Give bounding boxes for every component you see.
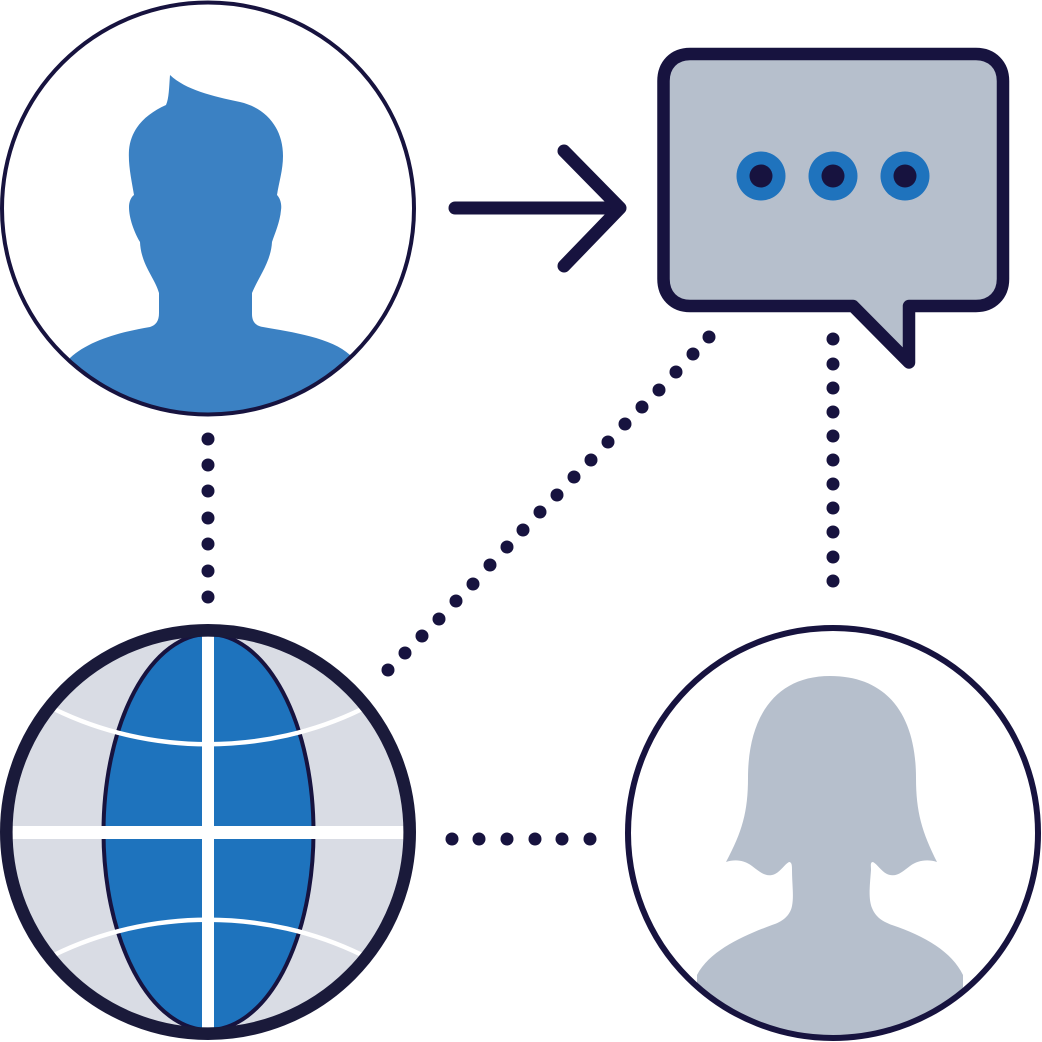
dotted connector: male user to globe	[202, 432, 214, 604]
icon: globe	[6, 630, 410, 1034]
dotted connector: speech bubble to female user	[826, 332, 840, 588]
icon: typing dot two	[808, 152, 858, 200]
icon: typing dot one	[736, 152, 786, 200]
dotted connector: globe to female user	[446, 832, 596, 846]
icon: speech bubble	[664, 54, 1003, 362]
dotted connector: globe to speech bubble	[382, 330, 716, 676]
icon: typing dot three	[880, 152, 930, 200]
icon: female user in circle	[628, 628, 1038, 1038]
arrow: right	[455, 151, 620, 266]
icon: male user in circle	[2, 2, 414, 415]
